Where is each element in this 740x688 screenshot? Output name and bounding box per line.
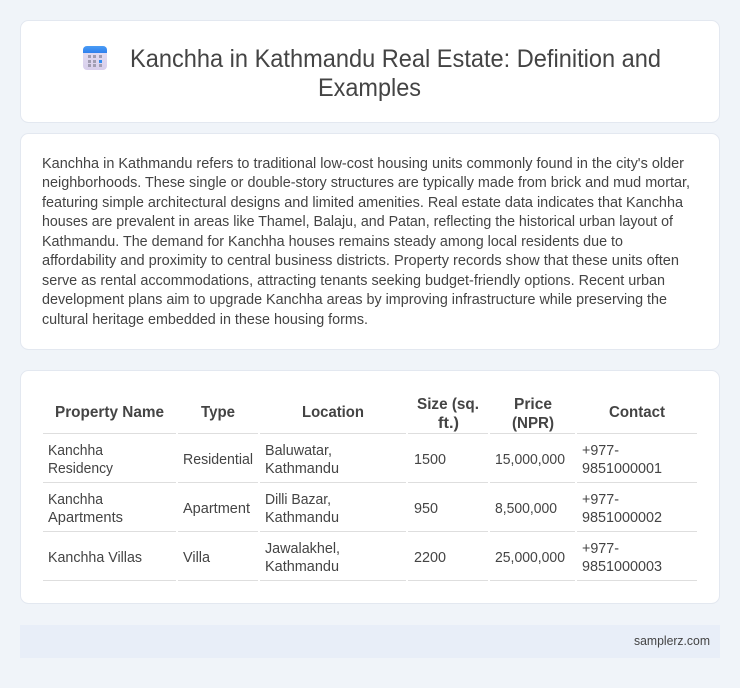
text block: description: Kanchha in Kathmandu refers to traditional low-cost housing units commonly found in the city's older [42,156,684,172]
table row: Kanchha Apartments: Kathmandu [265,510,339,526]
title [130,45,661,102]
table row: Kanchha Residency: Kathmandu [265,461,339,477]
text block: description: houses are prevalent in areas like Thamel, Balaju, and Patan, reflecting the historical urban layout of [42,214,674,230]
text block: description: development plans aim to upgrade Kanchha areas by improving infrastructure while preserving the [42,292,667,308]
text block: description: featuring simple architectural designs and limited amenities. Real estate data indicates that Kanchha [42,195,683,211]
table row: Kanchha Residency: Residential [183,452,253,468]
text block: description: cultural heritage embedded in these housing forms. [42,312,368,328]
table header row [55,396,665,432]
table row: Kanchha Apartments: Dilli Bazar, [265,492,331,508]
table row: Kanchha Apartments: Apartments [48,510,123,526]
table row: Kanchha Villas: +977- [582,541,619,557]
table row: Kanchha Residency: 1500 [414,452,446,468]
icon: calendar [83,46,107,70]
text block: description [42,156,690,328]
text block: description: serve as rental accommodations, attracting tenants seeking budget-friendly options. Recent urban [42,273,665,289]
title: Examples [318,74,421,102]
table row: Kanchha Apartments: Apartment [183,501,250,517]
table row: Kanchha Villas: 2200 [414,550,446,566]
table row: Kanchha Apartments: 9851000002 [582,510,662,526]
table row: Kanchha Apartments: Kanchha [48,492,103,508]
table row: Kanchha Apartments [48,492,662,526]
table row: Kanchha Villas: 25,000,000 [495,550,565,566]
table row: Kanchha Residency: +977- [582,443,619,459]
table header row: Size (sq. [417,396,479,413]
table row: Kanchha Apartments: 950 [414,501,438,517]
text block: description: Kathmandu. The demand for Kanchha houses remains steady among local residents due to [42,234,623,250]
table row: Kanchha Residency: 9851000001 [582,461,662,477]
table row: Kanchha Apartments: +977- [582,492,619,508]
table row: Kanchha Residency: 15,000,000 [495,452,565,468]
text block: description: affordability and proximity to central business districts. Property records show that these units often [42,253,679,269]
table header row: Price [514,396,552,413]
table row: Kanchha Villas: Jawalakhel, [265,541,340,557]
table row: Kanchha Villas: Kanchha Villas [48,550,142,566]
table header row: Property Name [55,404,164,421]
panel: description [20,134,720,350]
panel: header [20,20,720,122]
table header row: Type [201,404,235,421]
footer: samplerz.com [634,634,710,648]
table row: Kanchha Residency [48,443,662,477]
table row: Kanchha Apartments: 8,500,000 [495,501,557,517]
table row: Kanchha Villas: 9851000003 [582,559,662,575]
table row: Kanchha Villas: Villa [183,550,210,566]
panel: property table [20,370,720,604]
text block: description: neighborhoods. These single or double-story structures are typically made from brick and mud mortar, [42,175,690,191]
table header row: ft.) [438,415,459,432]
footer [20,625,720,658]
table header row: Location [302,404,364,421]
table row: Kanchha Residency: Residency [48,461,114,477]
table row: Kanchha Residency: Baluwatar, [265,443,332,459]
table row lines [43,433,697,581]
table header row: Contact [609,404,665,421]
table row: Kanchha Villas [48,541,662,575]
table header row: (NPR) [512,415,554,432]
table row: Kanchha Residency: Kanchha [48,443,103,459]
table row: Kanchha Villas: Kathmandu [265,559,339,575]
title: Kanchha in Kathmandu Real Estate: Definition and [130,45,661,73]
